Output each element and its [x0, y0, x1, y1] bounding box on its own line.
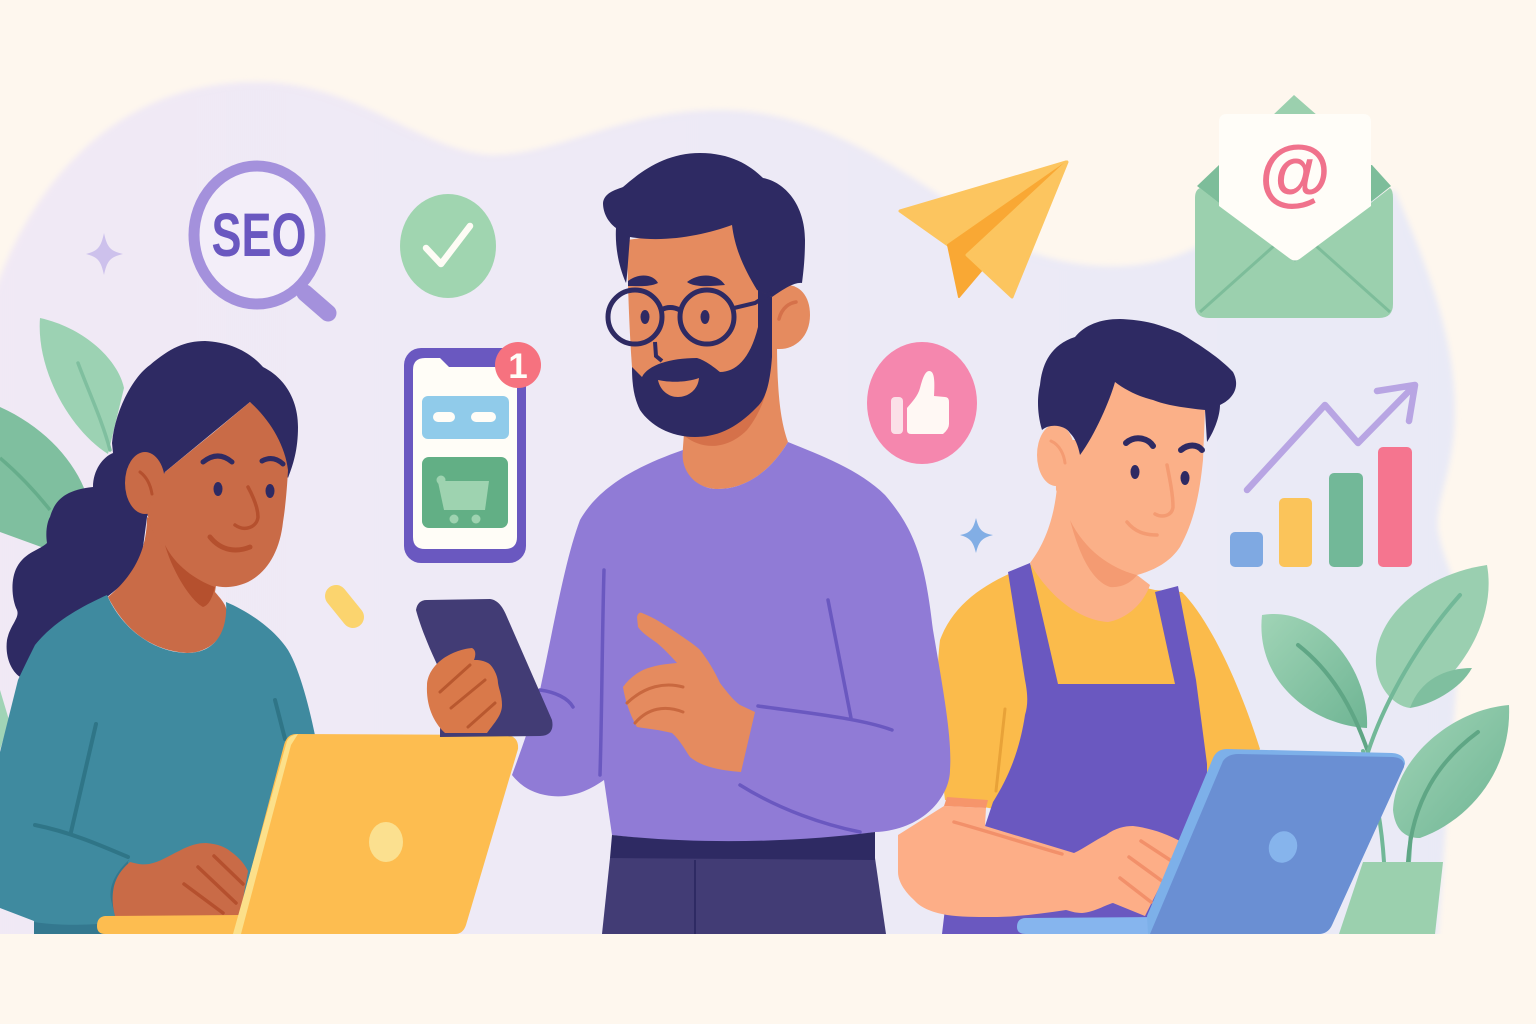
icon: phone with notification: [404, 342, 541, 563]
SEO magnifier icon: [194, 166, 328, 313]
man's neck: [682, 340, 788, 489]
man's left hand: [427, 648, 502, 733]
man's pants and belt: [602, 858, 886, 934]
phone in man's hand: [416, 599, 552, 737]
man's ear: [772, 285, 810, 349]
apron man's shirt: [938, 563, 1260, 810]
apron man's neck: [1030, 480, 1150, 622]
woman's ear: [125, 452, 165, 514]
woman's hand: [110, 843, 248, 916]
apron man's hair: [1038, 319, 1236, 455]
growth chart: [1230, 385, 1415, 567]
woman's sweater: [0, 595, 316, 934]
icon: email envelope: [1195, 95, 1393, 318]
blue laptop: [1017, 749, 1405, 934]
apron: [942, 563, 1207, 934]
man's hair: [603, 153, 805, 297]
right plant: [1261, 565, 1509, 934]
man's mouth: [658, 378, 699, 397]
SEO magnifier icon: SEO: [212, 201, 306, 269]
notification badge: 1: [508, 347, 528, 386]
icon: purple sparkle: [86, 233, 123, 275]
apron man's face: [1055, 382, 1205, 575]
man's sweater: [512, 442, 950, 842]
woman's ponytail and hair: [7, 341, 298, 690]
icon: check badge: [400, 194, 496, 298]
man's eyes and brows: [628, 275, 725, 324]
person: woman with laptop: [0, 341, 518, 934]
man's face: [628, 225, 772, 410]
icon: blue sparkle: [960, 518, 993, 553]
man's beard: [632, 290, 772, 437]
icon: paper plane: [900, 162, 1067, 297]
man's glasses: [608, 290, 772, 361]
person: center man with glasses: [416, 153, 950, 934]
person: man in apron with laptop: [898, 319, 1405, 934]
apron man's ear: [1037, 424, 1075, 486]
man's pointing hand: [623, 613, 755, 772]
apron man's features: [1126, 438, 1202, 535]
left plant leaves: [0, 318, 124, 750]
notification badge: [495, 342, 541, 388]
icon: yellow pill: [336, 596, 353, 617]
plant pot: [1339, 862, 1443, 934]
yellow laptop: [97, 734, 518, 934]
apron man's arm and hand: [898, 797, 1182, 917]
icon: email envelope: @: [1259, 130, 1331, 213]
woman's neck: [108, 517, 227, 653]
woman's face: [147, 402, 288, 587]
icon: thumbs up badge: [867, 342, 977, 464]
